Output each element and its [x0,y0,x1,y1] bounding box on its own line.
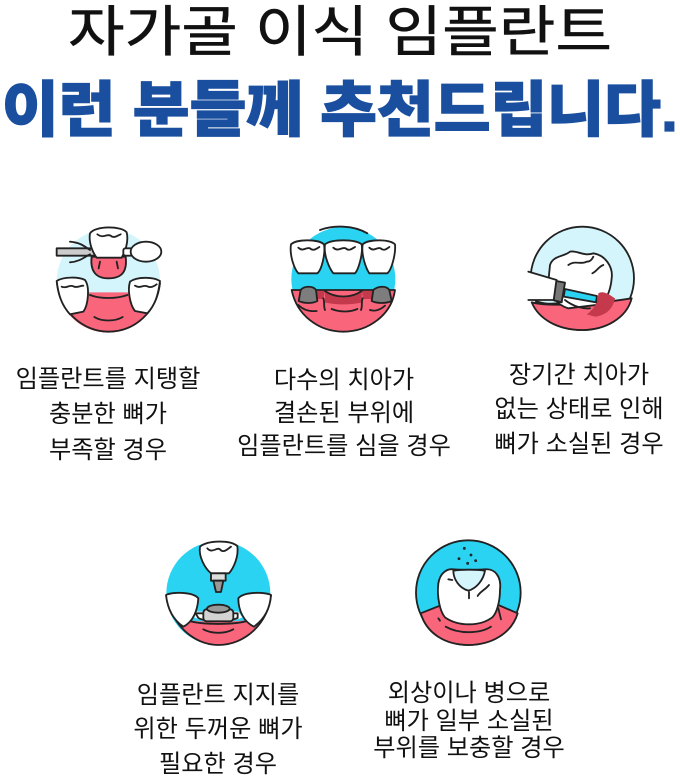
label: card 1: 부족할 경우 [49,437,167,464]
label: card 5: 외상이나 병으로 [388,680,550,707]
heading line 2: 이런 분들께 추천드립니다. [2,77,678,144]
label: card 5 [373,680,565,762]
title [2,1,678,144]
label: card 4: 임플란트 지지를 [137,682,299,709]
icon background [291,227,395,331]
label: card 3 [494,362,664,458]
label: card 2: 다수의 치아가 [274,367,414,394]
label: card 2: 임플란트를 심을 경우 [237,433,451,460]
icon: damaged tooth [416,540,521,645]
icon: multiple teeth bridge [291,227,395,332]
label: card 1: 충분한 뼈가 [49,401,167,428]
label: card 3: 뼈가 소실된 경우 [494,431,664,458]
icon background [531,227,634,330]
heading line 1: 자가골 이식 임플란트 [68,1,612,63]
bone particles [458,548,476,564]
label: card 1 [16,366,200,464]
label: card 3: 없는 상태로 인해 [494,396,664,423]
icon background [57,229,160,333]
icon: implant abutment over thick bone [166,541,271,645]
icon: bone loss with tool [528,227,634,330]
icon: tooth lifted over graft [53,227,163,335]
label: card 5: 뼈가 일부 소실된 [384,708,554,735]
label: card 3: 장기간 치아가 [509,362,649,389]
label: card 1: 임플란트를 지탱할 [16,366,200,393]
label: card 5: 부위를 보충할 경우 [373,735,565,762]
icon background [166,541,270,645]
label: card 2: 결손된 부위에 [274,400,414,427]
label: card 4: 위한 두꺼운 뼈가 [133,716,303,743]
label: card 4 [133,682,303,778]
label: card 2 [237,367,451,460]
icon background [416,540,521,645]
label: card 4: 필요한 경우 [159,751,277,778]
